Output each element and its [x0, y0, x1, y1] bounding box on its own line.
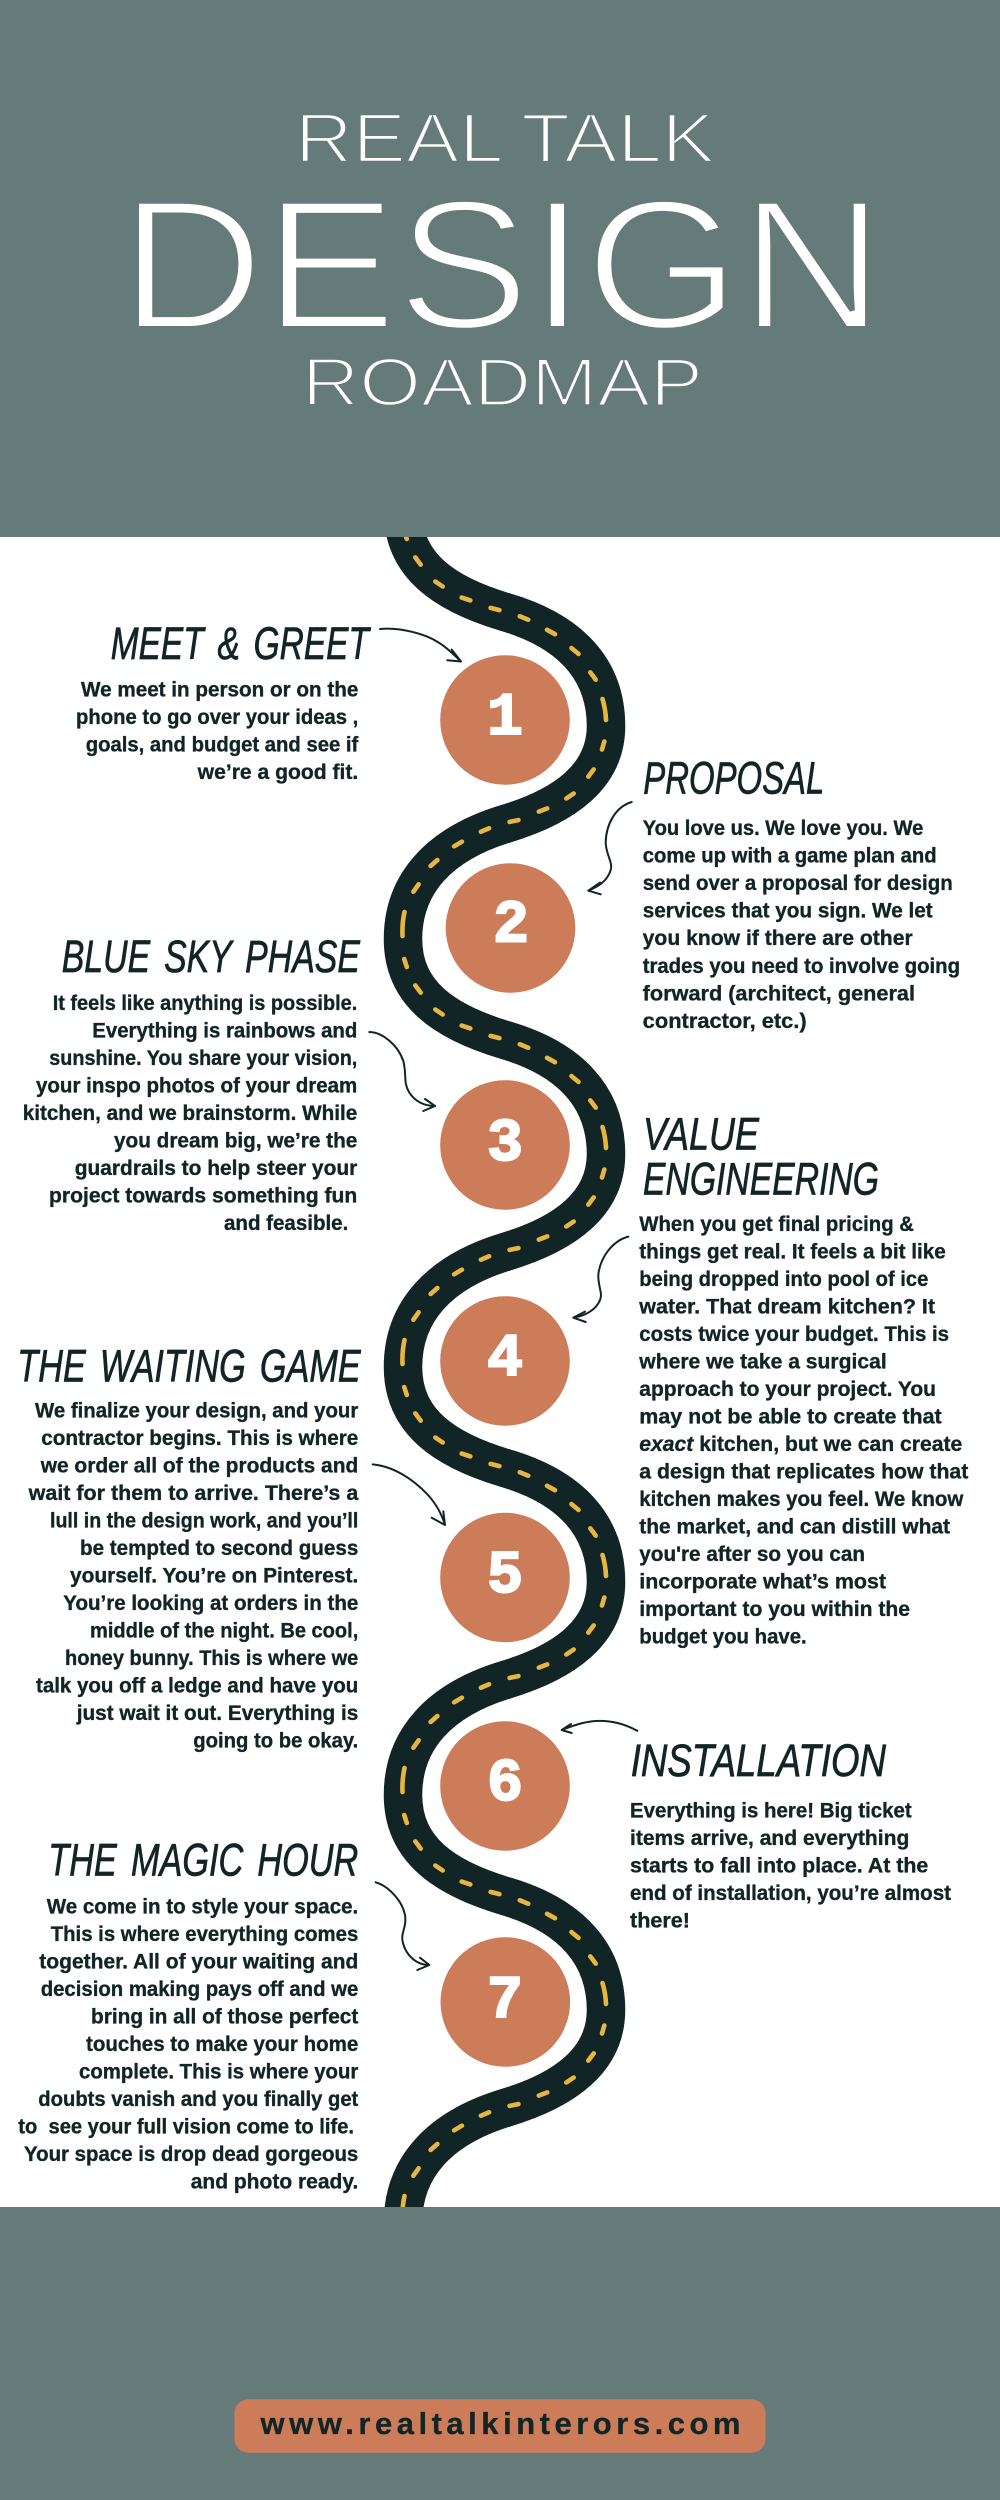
body text: the magic hour: decision making pays off and we	[41, 1978, 358, 2001]
body text: meet and greet: phone to go over your ideas ,	[76, 706, 358, 729]
heading: value engineering: VALUE	[643, 1108, 760, 1160]
body text: the magic hour: to see your full vision come to life.	[18, 2115, 354, 2138]
title line: roadmap: ROADMAP	[302, 344, 703, 420]
body text: the waiting game: We finalize your design, and your	[35, 1400, 358, 1423]
arrow to step 6	[562, 1721, 637, 1733]
heading: proposal: PROPOSAL	[643, 753, 824, 804]
title line: design: DESIGN	[120, 162, 884, 368]
body text: value engineering: budget you have.	[639, 1626, 807, 1648]
road surface	[403, 490, 606, 2240]
body text: blue sky phase: and feasible.	[224, 1212, 348, 1235]
heading: value engineering	[643, 1108, 879, 1205]
footer band	[0, 2207, 1000, 2500]
body text: value engineering: where we take a surgical	[638, 1350, 887, 1374]
arrow to step 5	[373, 1464, 445, 1525]
body text: meet and greet	[76, 679, 359, 784]
body text: the waiting game: lull in the design work, and you’ll	[50, 1510, 358, 1533]
heading: value engineering: ENGINEERING	[643, 1154, 879, 1205]
body text: installation: Everything is here! Big ticket	[630, 1800, 912, 1823]
body text: meet and greet: goals, and budget and see if	[86, 734, 359, 756]
body text: blue sky phase	[23, 992, 357, 1235]
body text: value engineering: the market, and can distill what	[639, 1516, 950, 1538]
body text: installation: there!	[630, 1909, 690, 1932]
body text: blue sky phase: sunshine. You share your vision,	[49, 1047, 357, 1070]
arrow to step 4	[573, 1237, 628, 1322]
body text: the waiting game: be tempted to second guess	[80, 1537, 358, 1560]
step marker 1: 1	[487, 685, 523, 753]
body text: the waiting game: just wait it out. Everything is	[76, 1702, 358, 1725]
body text: the magic hour: We come in to style your space.	[47, 1895, 358, 1918]
title	[120, 99, 884, 420]
body text: the magic hour: together. All of your waiting and	[39, 1950, 358, 1973]
step marker 6: 6	[487, 1751, 523, 1819]
body text: value engineering: kitchen makes you feel. We know	[639, 1488, 964, 1511]
body text: proposal: forward (architect, general	[643, 982, 915, 1005]
panel: value engineering	[638, 1108, 968, 1648]
body text: proposal: send over a proposal for design	[643, 872, 953, 895]
heading: meet and greet: MEET & GREET	[111, 618, 372, 669]
step marker 5: 5	[487, 1543, 523, 1611]
step marker 3	[440, 1080, 570, 1210]
body text: meet and greet: We meet in person or on the	[81, 679, 358, 702]
body text: meet and greet: we’re a good fit.	[197, 761, 358, 784]
body text: value engineering	[638, 1213, 968, 1648]
body text: value engineering: exact kitchen, but we can create	[639, 1433, 962, 1456]
arrow to step 3	[369, 1032, 435, 1111]
body text: the magic hour	[18, 1895, 358, 2193]
body text: proposal: services that you sign. We let	[643, 900, 933, 923]
step marker 1	[440, 655, 570, 785]
body text: the magic hour: and photo ready.	[191, 2170, 358, 2193]
heading: the waiting game: THE WAITING GAME	[17, 1340, 361, 1391]
step marker 7	[440, 1937, 570, 2067]
heading: the magic hour: THE MAGIC HOUR	[48, 1834, 358, 1885]
body text: value engineering: important to you within the	[639, 1598, 910, 1621]
body text: value engineering: a design that replicates how that	[639, 1460, 968, 1484]
body text: value engineering: you're after so you can	[639, 1543, 865, 1566]
body text: the magic hour: doubts vanish and you finally get	[38, 2088, 358, 2111]
body text: value engineering: approach to your project. You	[639, 1378, 936, 1401]
step marker 2	[446, 863, 575, 993]
step marker 6	[440, 1721, 570, 1851]
arrow to step 7	[376, 1882, 429, 1970]
body text: the waiting game: we order all of the products and	[40, 1455, 358, 1478]
body text: the magic hour: complete. This is where your	[79, 2060, 358, 2083]
body text: value engineering: water. That dream kitchen? It	[638, 1296, 935, 1318]
panel: the waiting game	[17, 1340, 361, 1753]
panel: proposal	[643, 753, 960, 1033]
panel: meet and greet	[76, 618, 372, 784]
body text: blue sky phase: project towards something fun	[49, 1185, 357, 1208]
panel: blue sky phase	[23, 931, 361, 1235]
body text: the waiting game: wait for them to arrive. There’s a	[28, 1482, 359, 1505]
road centre-line dashes	[402, 129, 606, 2251]
body text: proposal: you know if there are other	[643, 927, 913, 950]
panel: installation	[630, 1735, 951, 1932]
website button	[234, 2399, 766, 2453]
body text: proposal: You love us. We love you. We	[643, 817, 923, 840]
body text: blue sky phase: your inspo photos of your dream	[36, 1075, 357, 1098]
body text: the waiting game	[28, 1400, 359, 1753]
body text: blue sky phase: Everything is rainbows and	[92, 1020, 357, 1043]
body text: value engineering: things get real. It feels a bit like	[639, 1240, 946, 1264]
body text: the waiting game: going to be okay.	[193, 1730, 358, 1753]
body text: the waiting game: You’re looking at orders in the	[63, 1592, 358, 1615]
body text: blue sky phase: you dream big, we’re the	[114, 1130, 357, 1153]
body text: blue sky phase: It feels like anything is possible.	[53, 992, 357, 1015]
step marker 3: 3	[487, 1111, 523, 1179]
step marker 4: 4	[487, 1326, 523, 1394]
step marker 4	[440, 1296, 570, 1426]
body text: the waiting game: honey bunny. This is where we	[65, 1647, 358, 1670]
heading: blue sky phase: BLUE SKY PHASE	[62, 931, 361, 982]
body text: blue sky phase: kitchen, and we brainstorm. While	[23, 1102, 357, 1125]
arrow to step 2	[588, 802, 632, 894]
body text: installation: end of installation, you’re almost	[630, 1882, 951, 1905]
header band	[0, 0, 1000, 537]
body text: value engineering: may not be able to create that	[639, 1406, 942, 1428]
body text: value engineering: being dropped into pool of ice	[639, 1268, 928, 1291]
step marker 2: 2	[493, 893, 529, 961]
step marker 7: 7	[487, 1968, 523, 2036]
body text: value engineering: incorporate what’s most	[639, 1570, 886, 1594]
arrow to step 1	[380, 629, 461, 662]
body text: installation: starts to fall into place. At the	[630, 1854, 928, 1878]
body text: the magic hour: bring in all of those perfect	[91, 2005, 358, 2028]
body text: value engineering: costs twice your budget. This is	[639, 1323, 949, 1346]
body text: the waiting game: talk you off a ledge and have you	[36, 1675, 358, 1698]
body text: the magic hour: touches to make your home	[86, 2033, 358, 2056]
winding road	[402, 129, 606, 2251]
body text: the waiting game: yourself. You’re on Pinterest.	[70, 1565, 358, 1588]
body text: value engineering: When you get final pricing &	[639, 1213, 914, 1236]
body text: proposal: trades you need to involve going	[643, 955, 960, 978]
body text: the magic hour: Your space is drop dead gorgeous	[24, 2143, 358, 2166]
website button: www.realtalkinterors.com	[260, 2406, 740, 2441]
heading: installation: INSTALLATION	[631, 1735, 886, 1786]
body text: proposal	[643, 817, 960, 1033]
body text: the waiting game: middle of the night. Be cool,	[90, 1620, 358, 1643]
body text: installation: items arrive, and everything	[630, 1827, 909, 1850]
body text: blue sky phase: guardrails to help steer your	[75, 1157, 357, 1180]
step marker 5	[440, 1513, 570, 1642]
title line: real talk: REAL TALK	[295, 99, 715, 177]
body text: the waiting game: contractor begins. This is where	[41, 1427, 358, 1450]
body text: proposal: come up with a game plan and	[643, 844, 937, 868]
body text: installation	[630, 1800, 951, 1932]
body text: the magic hour: This is where everything comes	[51, 1923, 358, 1946]
panel: the magic hour	[18, 1834, 358, 2193]
body text: proposal: contractor, etc.)	[643, 1010, 807, 1033]
